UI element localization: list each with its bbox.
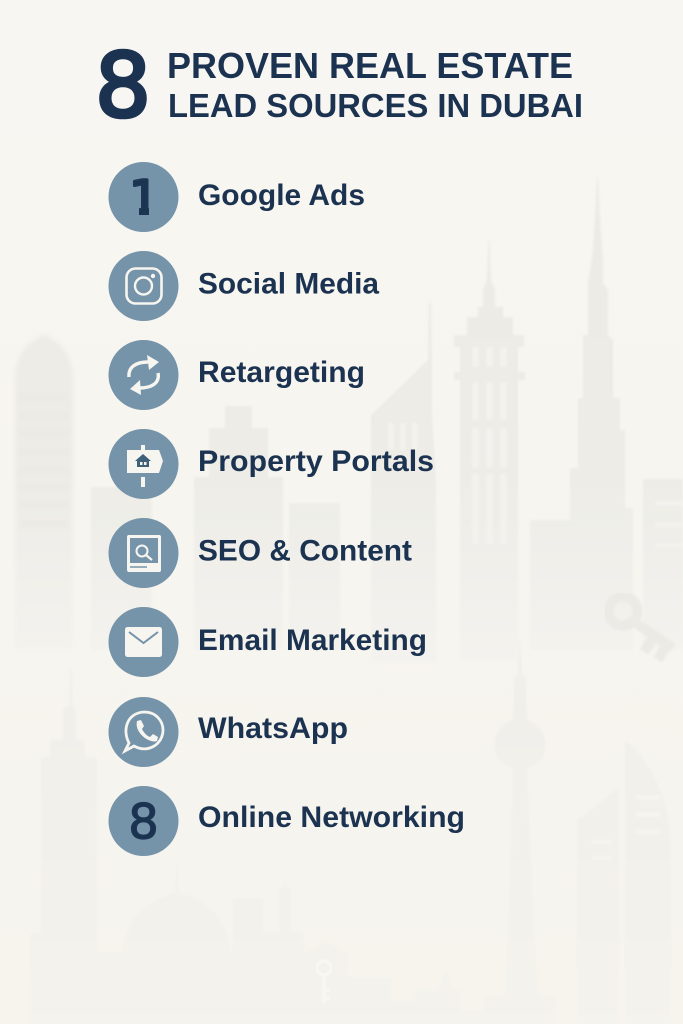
list item 8: Online Networking xyxy=(108,786,465,856)
label: Online Networking xyxy=(198,801,465,834)
far left tower xyxy=(15,335,73,650)
icon: whatsapp xyxy=(108,697,178,767)
title line 2: LEAD SOURCES IN DUBAI xyxy=(168,87,583,124)
list item 6: Email Marketing xyxy=(108,607,427,677)
title line 1: PROVEN REAL ESTATE xyxy=(167,45,573,86)
block beside stepped building xyxy=(289,503,340,650)
small buildings xyxy=(233,858,303,953)
observation tower xyxy=(494,640,546,1024)
label: SEO & Content xyxy=(198,534,412,568)
list item 3: Retargeting xyxy=(108,340,365,410)
low block left xyxy=(91,487,152,650)
label: Property Portals xyxy=(198,445,434,478)
badge: number 1: 1 xyxy=(129,170,159,224)
badge: number 8: 8 xyxy=(128,794,159,850)
base strip xyxy=(97,942,557,1024)
title xyxy=(95,34,583,138)
icon: retarget arrows xyxy=(108,340,178,410)
icon: envelope xyxy=(108,607,178,677)
list item 5: SEO & Content xyxy=(108,518,412,588)
label: Google Ads xyxy=(198,179,365,212)
spire tower xyxy=(570,177,633,650)
list item 2: Social Media xyxy=(108,251,379,321)
badge: number 1 xyxy=(108,162,178,232)
big number 8: 8 xyxy=(95,34,151,138)
central stepped block xyxy=(194,406,283,650)
label: Retargeting xyxy=(198,356,365,389)
right edge block xyxy=(643,479,683,650)
slanted right tower xyxy=(577,787,619,1024)
central tall tower xyxy=(454,240,525,660)
block left of spire xyxy=(530,520,582,650)
label: Social Media xyxy=(198,268,379,300)
lower skyline silhouette xyxy=(30,640,671,1024)
icon: search book xyxy=(108,518,178,588)
small key silhouette bottom xyxy=(317,961,331,1003)
dome xyxy=(122,863,231,953)
angular tower xyxy=(371,303,436,663)
curved right tower xyxy=(592,740,671,1024)
icon: instagram xyxy=(108,251,178,321)
upper skyline silhouette xyxy=(15,177,683,663)
key silhouette upper right xyxy=(608,596,673,660)
list item 7: WhatsApp xyxy=(108,697,348,767)
icon: property sign xyxy=(108,429,178,499)
list item 4: Property Portals xyxy=(108,429,434,499)
label: Email Marketing xyxy=(198,624,427,657)
list item 1: Google Ads xyxy=(108,162,365,232)
badge: number 8 xyxy=(108,786,178,856)
lower left tower xyxy=(30,668,97,1024)
infographic canvas xyxy=(16,48,682,856)
label: WhatsApp xyxy=(198,712,348,745)
